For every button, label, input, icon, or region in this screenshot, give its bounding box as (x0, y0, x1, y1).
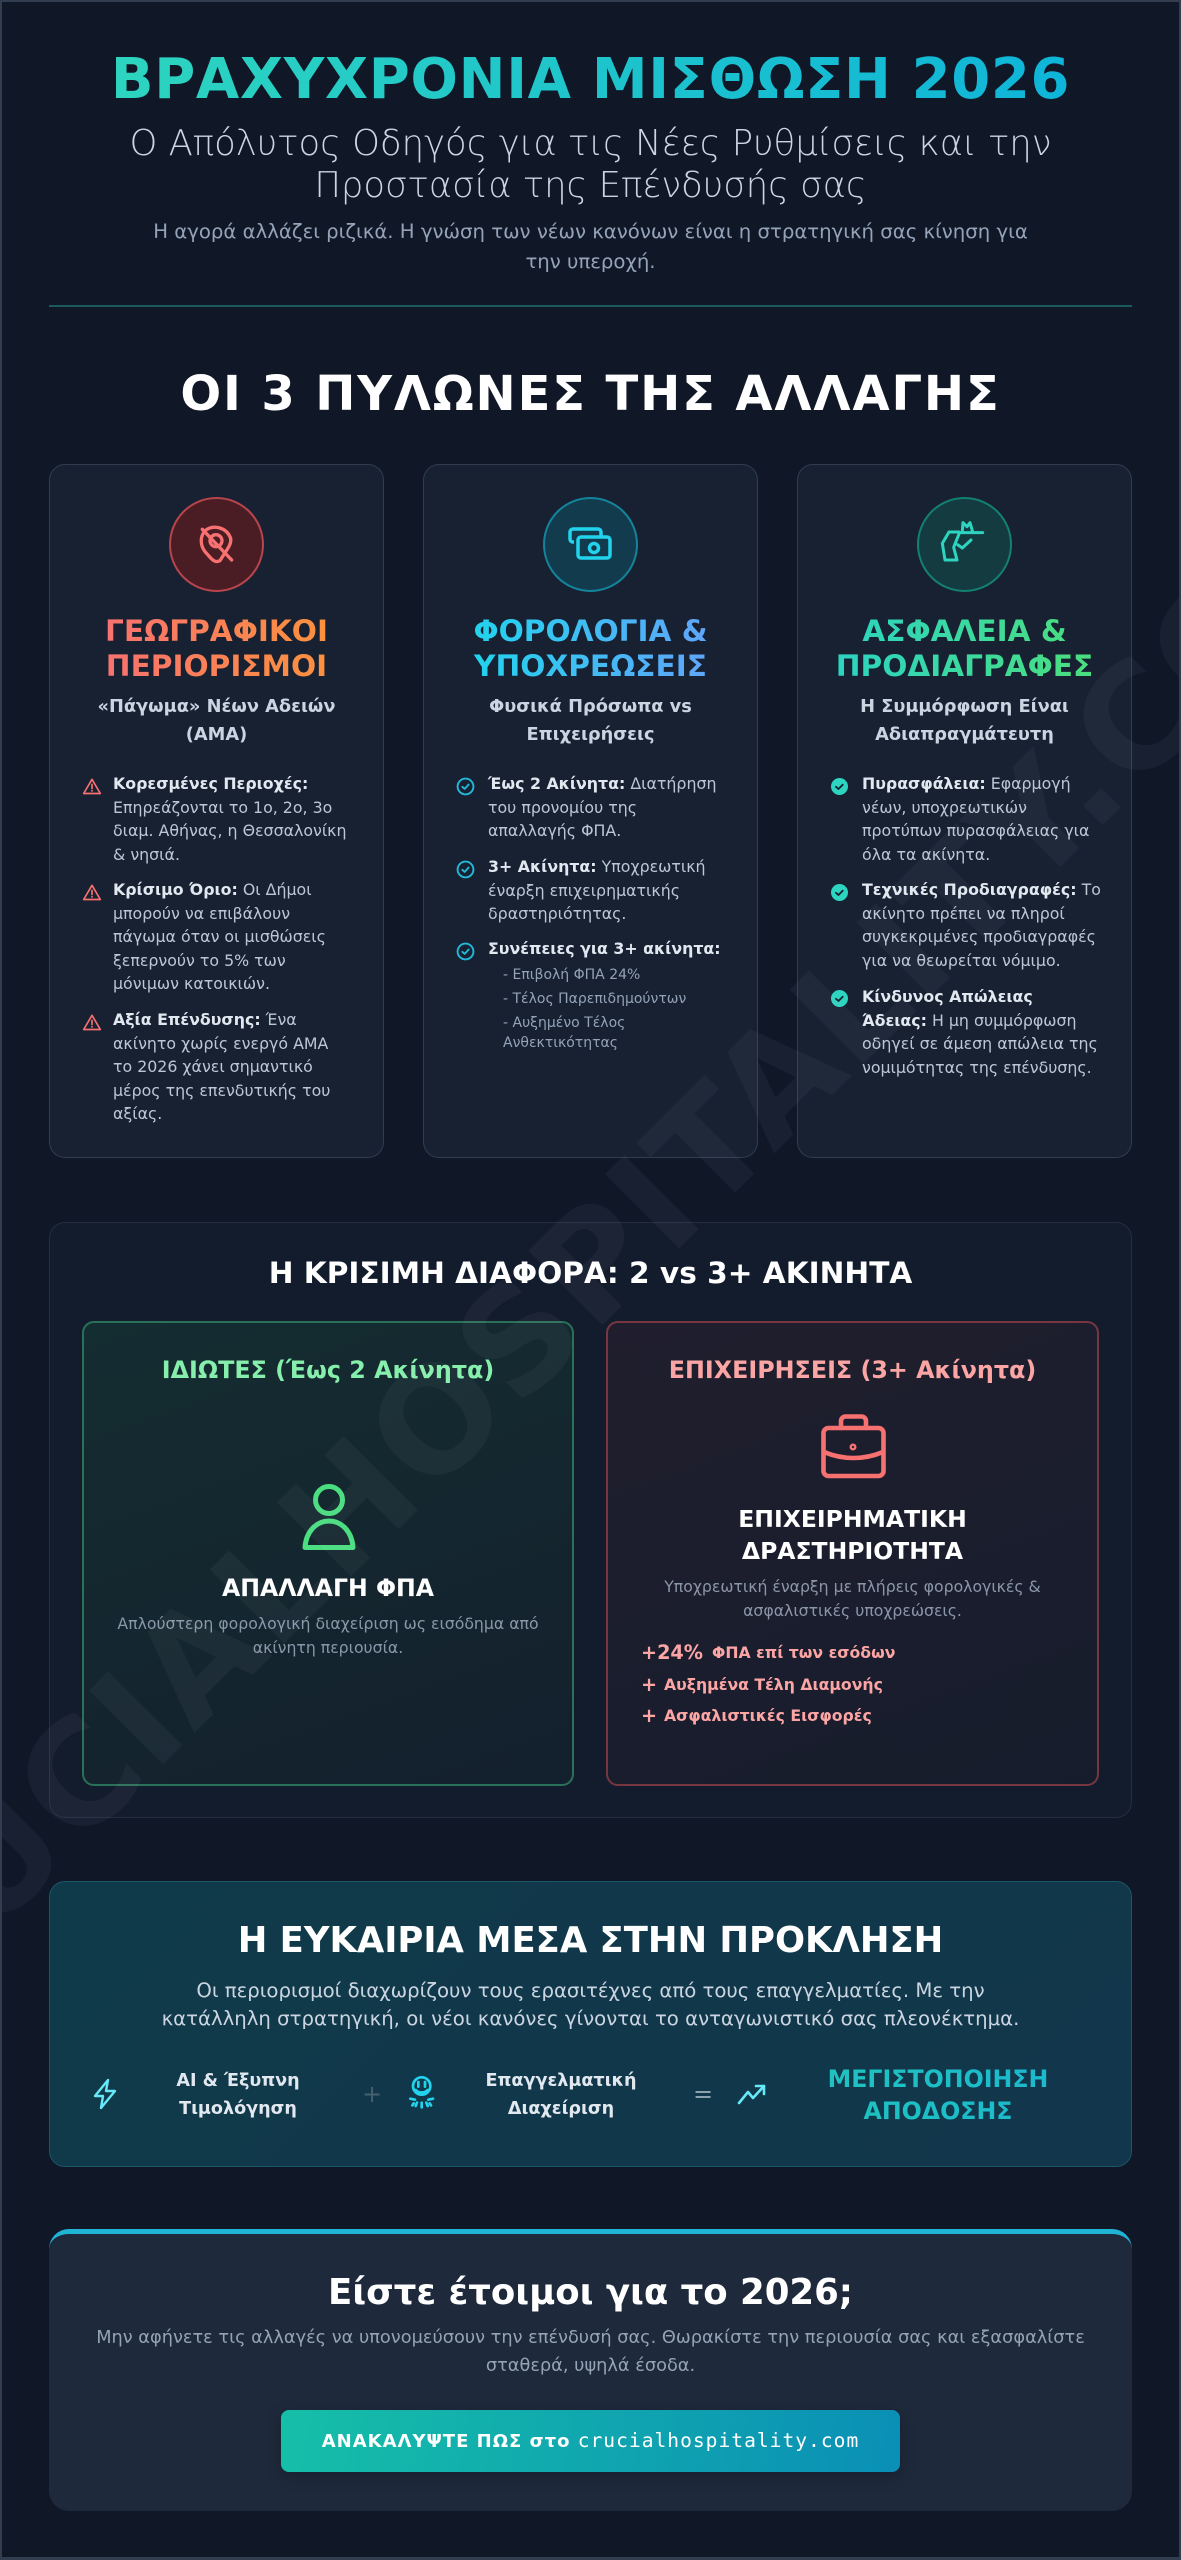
subheading: taxation: Φυσικά Πρόσωπα vs (489, 696, 692, 717)
subheading: geographic: «Πάγωμα» Νέων Αδειών (97, 696, 336, 717)
icon: management (409, 2076, 434, 2109)
list item: investment value: Αξία Επένδυσης: Ένα (113, 1010, 297, 1029)
heading: VAT exemption: ΑΠΑΛΛΑΓΗ ΦΠΑ (222, 1574, 434, 1602)
subheading: safety: Η Συμμόρφωση Είναι (860, 696, 1069, 717)
subheading: safety (860, 696, 1069, 745)
icon: check 1 (456, 778, 474, 796)
text: business activity: Υποχρεωτική έναρξη με πλήρεις φορολογικές & (664, 1577, 1041, 1596)
list item: fire safety: νέων, υποχρεωτικών (862, 798, 1027, 817)
text: call to action (96, 2328, 1085, 2376)
list item: critical threshold: πάγωμα όταν οι μισθώσεις (113, 927, 326, 946)
list item: 3+ properties (488, 857, 706, 923)
icon: check 2 (456, 860, 474, 878)
list item: critical threshold: μόνιμων κατοικιών. (113, 974, 270, 993)
list item: fire safety: Πυρασφάλεια: Εφαρμογή (862, 774, 1071, 793)
icon: warning 3 (82, 1014, 102, 1030)
list: business costs: Ασφαλιστικές Εισφορές (664, 1706, 872, 1725)
text: call to action: σταθερά, υψηλά έσοδα. (486, 2356, 695, 2376)
text: business activity (664, 1577, 1041, 1620)
icon: person (302, 1484, 356, 1550)
list item: licence loss risk: Κίνδυνος Απώλειας (862, 987, 1033, 1006)
list item: technical specs: ακίνητο πρέπει να πληροί (862, 904, 1065, 923)
subtitle (129, 123, 1052, 206)
heading: safety: ΑΣΦΑΛΕΙΑ & (862, 614, 1067, 648)
subheading: geographic: (ΑΜΑ) (186, 724, 247, 745)
text: business activity: ασφαλιστικές υποχρεώσεις. (743, 1601, 962, 1620)
heading: taxation: ΦΟΡΟΛΟΓΙΑ & (473, 614, 708, 648)
panel: geographic restrictions (49, 464, 384, 1158)
icon: filled check 1 (831, 778, 848, 795)
list item: saturated areas: Επηρεάζονται το 1ο, 2ο, 3ο (113, 798, 332, 817)
list item: investment value: ακίνητο χωρίς ενεργό ΑΜΑ (113, 1034, 328, 1053)
panel: individuals (82, 1321, 574, 1786)
list item: critical threshold: ξεπερνούν το 5% των (113, 951, 286, 970)
list item: saturated areas: & νησιά. (113, 845, 180, 864)
heading: critical difference: Η ΚΡΙΣΙΜΗ ΔΙΑΦΟΡΑ: 2 vs 3+ ΑΚΙΝΗΤΑ (269, 1256, 912, 1290)
subheading: taxation (489, 696, 692, 745)
text: call to action: Μην αφήνετε τις αλλαγές να υπονομεύσουν την επένδυσή σας. Θωρακίστε την περιουσία σας και εξασφαλίστε (96, 2328, 1085, 2348)
heading: business activity: ΔΡΑΣΤΗΡΙΟΤΗΤΑ (742, 1536, 963, 1564)
text: VAT exemption: ακίνητη περιουσία. (253, 1638, 403, 1657)
list item: fire safety (862, 774, 1089, 864)
heading: businesses: ΕΠΙΧΕΙΡΗΣΕΙΣ (3+ Ακίνητα) (669, 1356, 1036, 1384)
list item: saturated areas: Κορεσμένες Περιοχές: (113, 774, 308, 793)
icon glyph: pin with slash (200, 526, 234, 564)
icon: safety circle (917, 497, 1012, 592)
sub-list: consequences: - Επιβολή ΦΠΑ 24% (503, 967, 640, 983)
list item: investment value: το 2026 χάνει σημαντικό (113, 1057, 313, 1076)
list item: critical threshold: μπορούν να επιβάλουν (113, 904, 290, 923)
list item: technical specs: συγκεκριμένες προδιαγραφές (862, 927, 1096, 946)
icon: check 3 (456, 942, 474, 960)
list item: saturated areas: διαμ. Αθήνας, η Θεσσαλονίκη (113, 821, 346, 840)
sub-list: consequences: Ανθεκτικότητας (503, 1035, 618, 1051)
list item: technical specs (862, 880, 1101, 970)
list: business costs (641, 1641, 895, 1727)
list item: saturated areas (113, 774, 346, 864)
list: business costs: Αυξημένα Τέλη Διαμονής (664, 1675, 883, 1694)
list item: licence loss risk (862, 987, 1098, 1077)
heading: taxation: ΥΠΟΧΡΕΩΣΕΙΣ (474, 649, 707, 683)
label: professional management: Επαγγελματική (485, 2071, 637, 2091)
list item: 3+ properties: δραστηριότητας. (488, 904, 626, 923)
label: AI pricing: Τιμολόγηση (179, 2099, 297, 2119)
icon: warning 1 (82, 778, 102, 794)
list item: licence loss risk: νομιμότητας της επένδυσης. (862, 1058, 1092, 1077)
label: AI pricing (176, 2071, 300, 2119)
icon glyph: banknotes (568, 527, 612, 560)
panel: critical difference (49, 1222, 1132, 1818)
text: opportunity (162, 1979, 1019, 2030)
section heading: pillars: ΟΙ 3 ΠΥΛΩΝΕΣ ΤΗΣ ΑΛΛΑΓΗΣ (180, 366, 1001, 422)
sub-list: consequences: - Τέλος Παρεπιδημούντων (503, 991, 686, 1007)
label: AI pricing: AI & Έξυπνη (176, 2071, 300, 2091)
sub-list: consequences (503, 967, 686, 1051)
list: business costs: ΦΠΑ επί των εσόδων (712, 1643, 895, 1662)
heading: safety: ΠΡΟΔΙΑΓΡΑΦΕΣ (836, 649, 1093, 683)
icon: lightning bolt (94, 2078, 116, 2110)
heading: business activity (738, 1505, 967, 1564)
subheading: safety: Αδιαπραγμάτευτη (875, 724, 1054, 745)
icon: money circle (543, 497, 638, 592)
icon glyph: hand with check (940, 521, 984, 562)
panel: taxation (423, 464, 758, 1158)
list item: investment value: αξίας. (113, 1104, 162, 1123)
icon: filled check 2 (831, 884, 848, 901)
label: professional management: Διαχείριση (508, 2099, 614, 2119)
button (281, 2410, 900, 2472)
label: professional management (485, 2071, 637, 2119)
result: maximise return: ΑΠΟΔΟΣΗΣ (864, 2097, 1012, 2125)
list item: technical specs: για να θεωρείται νόμιμο. (862, 951, 1061, 970)
list item: up to 2 properties: απαλλαγής ΦΠΑ. (488, 821, 621, 840)
list item: 3+ properties: έναρξη επιχειρηματικής (488, 881, 680, 900)
list item: up to 2 properties: Έως 2 Ακίνητα: Διατήρηση (488, 774, 716, 793)
intro text: την υπεροχή. (525, 250, 656, 273)
heading: call to action: Είστε έτοιμοι για το 2026; (328, 2272, 853, 2313)
symbol: plus: + (362, 2080, 382, 2108)
list item: fire safety: προτύπων πυρασφάλειας για (862, 821, 1089, 840)
list: business costs: + (641, 1673, 657, 1696)
panel: safety (797, 464, 1132, 1158)
symbol: equals: = (693, 2080, 713, 2108)
icon: trend arrow (738, 2084, 766, 2104)
text: VAT exemption: Απλούστερη φορολογική διαχείριση ως εισόδημα από (117, 1614, 539, 1633)
panel: call to action (49, 2229, 1132, 2511)
list item: technical specs: Τεχνικές Προδιαγραφές: Το (862, 880, 1101, 899)
heading: opportunity: Η ΕΥΚΑΙΡΙΑ ΜΕΣΑ ΣΤΗΝ ΠΡΟΚΛΗΣΗ (238, 1920, 943, 1961)
icon: filled check 3 (831, 990, 848, 1007)
panel: opportunity (49, 1881, 1132, 2167)
result: maximise return (798, 2063, 1078, 2127)
result: maximise return: ΜΕΓΙΣΤΟΠΟΙΗΣΗ (828, 2065, 1048, 2093)
list item: licence loss risk: οδηγεί σε άμεση απώλεια της (862, 1034, 1098, 1053)
subtitle: Ο Απόλυτος Οδηγός για τις Νέες Ρυθμίσεις και την (129, 123, 1052, 164)
heading: taxation (423, 614, 758, 684)
heading: safety (797, 614, 1132, 684)
heading: business activity: ΕΠΙΧΕΙΡΗΜΑΤΙΚΗ (738, 1505, 967, 1533)
list: business costs: + (641, 1704, 657, 1727)
panel: businesses (606, 1321, 1099, 1786)
list item: up to 2 properties (488, 774, 716, 840)
heading: geographic (49, 614, 384, 684)
list item: fire safety: όλα τα ακίνητα. (862, 845, 990, 864)
list: business costs: +24% (641, 1641, 703, 1664)
text: opportunity: Οι περιορισμοί διαχωρίζουν τους ερασιτέχνες από τους επαγγελματίες. Με την (196, 1979, 985, 2002)
text: VAT exemption (117, 1614, 539, 1657)
subtitle: Προστασία της Επένδυσής σας (314, 164, 867, 206)
list item: consequences: Συνέπειες για 3+ ακίνητα: (488, 939, 721, 958)
heading: geographic: ΓΕΩΓΡΑΦΙΚΟΙ (105, 614, 328, 648)
button: ΑΝΑΚΑΛΥΨΤΕ ΠΩΣ στο crucialhospitality.com (322, 2429, 859, 2452)
intro text: Η αγορά αλλάζει ριζικά. Η γνώση των νέων κανόνων είναι η στρατηγική σας κίνηση για (153, 220, 1028, 243)
intro text (153, 220, 1028, 273)
title: ΒΡΑΧΥΧΡΟΝΙΑ ΜΙΣΘΩΣΗ 2026 (111, 47, 1070, 112)
list item: critical threshold: Κρίσιμο Όριο: Οι Δήμοι (113, 880, 312, 899)
list item: investment value (113, 1010, 330, 1123)
list item: 3+ properties: 3+ Ακίνητα: Υποχρεωτική (488, 857, 706, 876)
icon: warning 2 (82, 884, 102, 900)
text: opportunity: κατάλληλη στρατηγική, οι νέοι κανόνες γίνονται το ανταγωνιστικό σας πλεονέκτημα. (162, 2007, 1019, 2030)
list item: licence loss risk: Άδειας: Η μη συμμόρφωση (862, 1011, 1077, 1030)
icon: briefcase (821, 1414, 886, 1478)
sub-list: consequences: - Αυξημένο Τέλος (503, 1015, 625, 1031)
subheading: geographic (97, 696, 336, 745)
heading: geographic: ΠΕΡΙΟΡΙΣΜΟΙ (106, 649, 327, 683)
list item: investment value: μέρος της επενδυτικής του (113, 1081, 330, 1100)
subheading: taxation: Επιχειρήσεις (526, 724, 655, 745)
icon: location off (169, 497, 264, 592)
heading: individuals: ΙΔΙΩΤΕΣ (Έως 2 Ακίνητα) (162, 1356, 494, 1384)
list item: up to 2 properties: του προνομίου της (488, 798, 637, 817)
list item: critical threshold (113, 880, 326, 993)
